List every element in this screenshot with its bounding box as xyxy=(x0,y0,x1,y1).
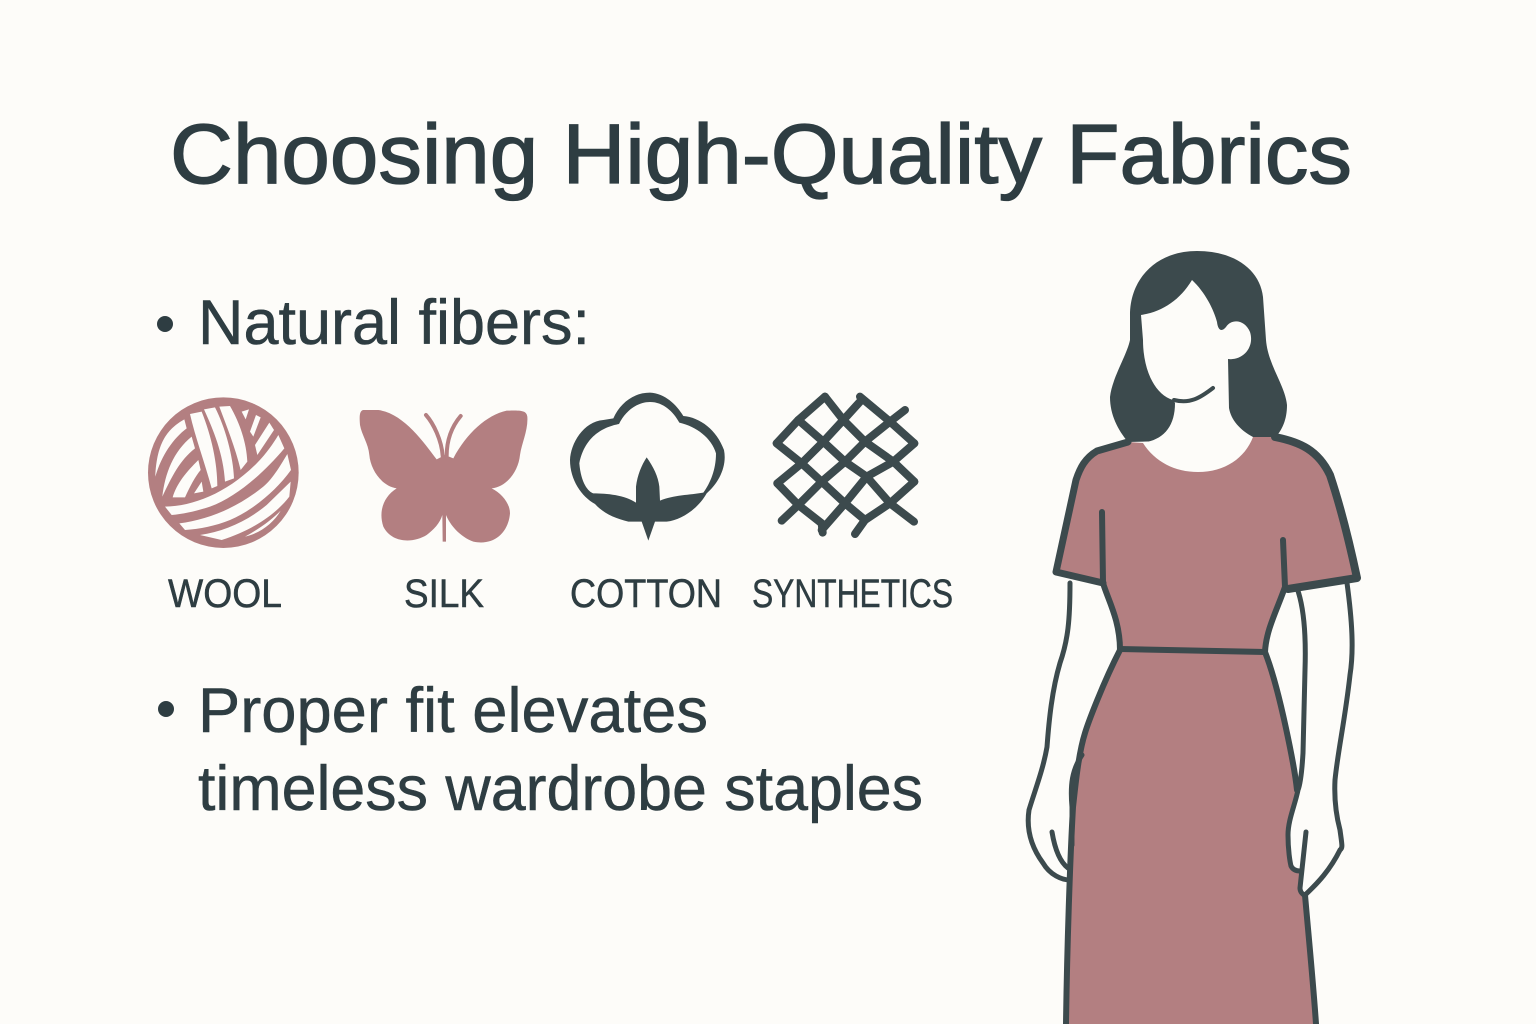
label: silk: SILK xyxy=(404,572,484,616)
icon: cotton boll xyxy=(570,393,725,541)
icon: wool yarn ball xyxy=(148,397,299,548)
bullet: natural fibers: Natural fibers: xyxy=(198,288,590,358)
title: Choosing High-Quality Fabrics xyxy=(170,107,1352,201)
label: wool: WOOL xyxy=(168,572,282,616)
dress fill xyxy=(1056,437,1357,1024)
jaw line xyxy=(1174,388,1213,401)
arms and hands xyxy=(1028,583,1352,895)
bullet: proper fit: Proper fit elevates xyxy=(198,676,708,746)
icon: synthetics mesh xyxy=(777,397,914,534)
face and neck xyxy=(1141,280,1253,460)
label: cotton: COTTON xyxy=(570,572,722,616)
icon: silk butterfly xyxy=(360,410,527,543)
bullet: proper fit xyxy=(158,676,923,824)
figure: woman in dress xyxy=(1028,251,1357,1024)
dress outline xyxy=(1056,437,1357,1024)
label: synthetics: SYNTHETICS xyxy=(752,572,953,616)
hair xyxy=(1110,251,1287,442)
bullet: proper fit: timeless wardrobe staples xyxy=(198,754,923,824)
